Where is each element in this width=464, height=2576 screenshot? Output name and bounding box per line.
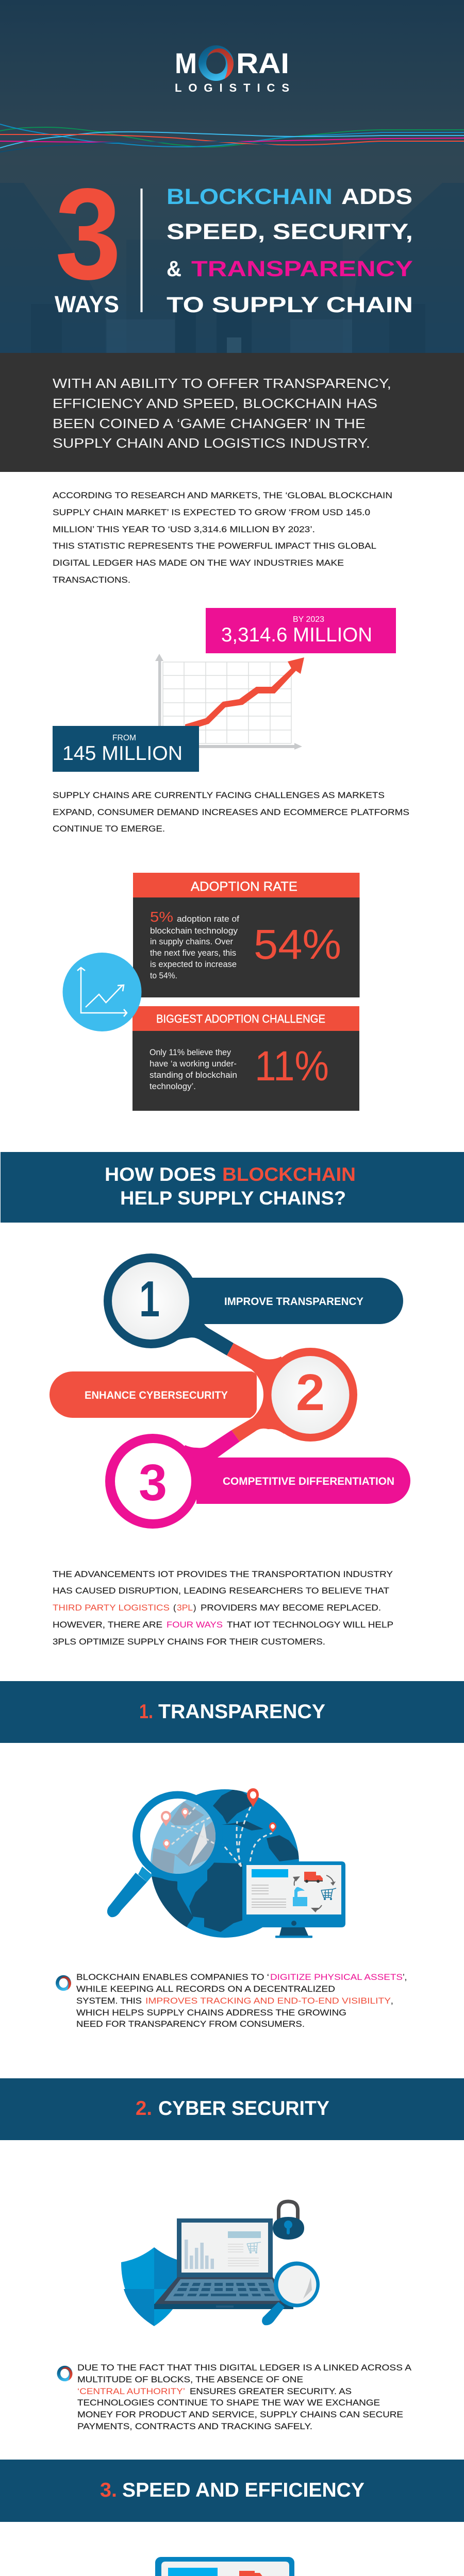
text block: transparency: WHILE KEEPING ALL RECORDS ON A DECENTRALIZED	[76, 1985, 335, 1994]
title	[167, 184, 413, 317]
panel: biggest adoption challenge: standing of blockchain	[150, 1070, 237, 1080]
text block: IoT and 3PL: THIRD PARTY LOGISTICS	[53, 1603, 170, 1613]
step 1: improve transparency: IMPROVE TRANSPARENCY	[224, 1296, 363, 1308]
title: SPEED, SECURITY,	[167, 219, 413, 244]
logo: Morai Logistics: M	[175, 47, 197, 79]
banner heading: 3. speed and efficiency: SPEED AND EFFICIENCY	[122, 2479, 364, 2501]
banner heading: how does blockchain help supply chains: HOW DOES	[105, 1164, 216, 1185]
banner heading: 3. speed and efficiency	[0, 2460, 464, 2522]
monitor with supply chain cycle	[242, 1861, 345, 1938]
text block: IoT and 3PL: 3PLS OPTIMIZE SUPPLY CHAINS FOR THEIR CUSTOMERS.	[53, 1637, 325, 1647]
text block: IoT and 3PL: (	[173, 1603, 176, 1613]
text block: cyber security: PAYMENTS, CONTRACTS AND TRACKING SAFELY.	[77, 2422, 312, 2431]
callout: from 145 million: FROM	[112, 734, 136, 742]
panel: intro statement: WITH AN ABILITY TO OFFER TRANSPARENCY,	[53, 377, 391, 391]
panel: intro statement	[0, 353, 464, 472]
title: TRANSPARENCY	[191, 257, 413, 281]
callout: by 2023	[206, 608, 396, 653]
diagram: three blockchain benefits	[49, 1253, 410, 1529]
text block: cyber security: DUE TO THE FACT THAT THIS DIGITAL LEDGER IS A LINKED ACROSS A	[77, 2363, 411, 2372]
panel: adoption rate: 5%	[150, 909, 173, 925]
panel: biggest adoption challenge	[132, 1006, 359, 1111]
text block: supply chain challenges: SUPPLY CHAINS ARE CURRENTLY FACING CHALLENGES AS MARKETS	[53, 791, 385, 800]
text block: market research paragraph: DIGITAL LEDGER HAS MADE ON THE WAY INDUSTRIES MAKE	[53, 558, 344, 568]
bullet icon: logo ring	[57, 2366, 72, 2381]
magnifying glass	[107, 1791, 216, 1918]
banner heading: how does blockchain help supply chains: BLOCKCHAIN	[222, 1164, 356, 1185]
text block: cyber security: ‘CENTRAL AUTHORITY’	[77, 2387, 185, 2396]
text block: transparency: ’,	[403, 1973, 407, 1982]
step 1: improve transparency: 1	[139, 1270, 160, 1327]
step 2: enhance cybersecurity	[49, 1343, 357, 1442]
title: ADDS	[341, 184, 412, 209]
text block: supply chain challenges: EXPAND, CONSUMER DEMAND INCREASES AND ECOMMERCE PLATFORMS	[53, 808, 409, 817]
banner heading: 2. cyber security: 2.	[136, 2097, 152, 2120]
banner heading: 1. transparency: 1.	[139, 1701, 153, 1723]
text block: transparency	[76, 1973, 407, 2029]
text block: IoT and 3PL: HOWEVER, THERE ARE	[53, 1620, 162, 1630]
divider	[140, 189, 142, 312]
text block: IoT and 3PL: HAS CAUSED DISRUPTION, LEADING RESEARCHERS TO BELIEVE THAT	[53, 1586, 389, 1596]
panel: biggest adoption challenge: Only 11% believe they	[150, 1047, 231, 1057]
step 1: improve transparency	[104, 1253, 403, 1355]
panel: adoption rate: blockchain technology	[150, 926, 238, 936]
panel: intro statement: BEEN COINED A ‘GAME CHANGER’ IN THE	[53, 417, 366, 431]
text block: cyber security	[77, 2363, 411, 2431]
text block: market research paragraph: SUPPLY CHAIN MARKET’ IS EXPECTED TO GROW ‘FROM USD 145.0	[53, 508, 370, 517]
text block: cyber security: MULTITUDE OF BLOCKS, THE ABSENCE OF ONE	[77, 2375, 303, 2384]
text block: supply chain challenges: CONTINUE TO EMERGE.	[53, 824, 165, 834]
logo: Morai Logistics	[175, 45, 289, 94]
step 3: competitive differentiation	[105, 1430, 410, 1529]
panel: adoption rate: adoption rate of	[177, 914, 239, 924]
text block: cyber security: MONEY FOR PRODUCT AND SERVICE, SUPPLY CHAINS CAN SECURE	[77, 2410, 403, 2419]
text block: market research paragraph: TRANSACTIONS.	[53, 575, 130, 585]
chart: market growth	[53, 608, 396, 772]
text block: transparency: WHICH HELPS SUPPLY CHAINS ADDRESS THE GROWING	[76, 2008, 346, 2018]
banner heading: 1. transparency	[0, 1681, 464, 1743]
icon: growth chart circle	[63, 953, 141, 1031]
text block: transparency: NEED FOR TRANSPARENCY FROM CONSUMERS.	[76, 2020, 305, 2029]
globe	[147, 1788, 304, 1938]
banner heading: how does blockchain help supply chains	[1, 1152, 464, 1223]
growth arrow	[185, 657, 304, 728]
banner heading: 3. speed and efficiency: 3.	[100, 2479, 117, 2501]
text block: transparency: BLOCKCHAIN ENABLES COMPANIES TO ‘	[76, 1973, 269, 1982]
text block: supply chain challenges	[53, 791, 409, 834]
logo: Morai Logistics: RAI	[236, 47, 289, 79]
title: TO SUPPLY CHAIN	[167, 293, 413, 317]
text block: market research paragraph	[53, 491, 392, 585]
laptop	[154, 2218, 293, 2309]
text block: transparency: ,	[391, 1996, 393, 2006]
text block: transparency: DIGITIZE PHYSICAL ASSETS	[270, 1973, 403, 1982]
illustration: speed and efficiency scene	[83, 2557, 373, 2576]
text block: IoT and 3PL: THAT IOT TECHNOLOGY WILL HELP	[227, 1620, 393, 1630]
text block: transparency: SYSTEM. THIS	[76, 1996, 142, 2006]
step 3: competitive differentiation: COMPETITIVE DIFFERENTIATION	[223, 1476, 394, 1487]
text block: cyber security: TECHNOLOGIES CONTINUE TO SHAPE THE WAY WE EXCHANGE	[77, 2398, 380, 2408]
title: &	[167, 257, 181, 281]
banner heading: 2. cyber security: CYBER SECURITY	[158, 2097, 329, 2120]
illustration: laptop security	[121, 2201, 320, 2326]
chart grid	[163, 662, 291, 743]
step 2: enhance cybersecurity: ENHANCE CYBERSECURITY	[85, 1389, 228, 1401]
text block: market research paragraph: ACCORDING TO RESEARCH AND MARKETS, THE ‘GLOBAL BLOCKCHAIN	[53, 491, 392, 500]
panel: biggest adoption challenge: technology’.	[150, 1081, 196, 1091]
text block: IoT and 3PL: )	[193, 1603, 196, 1613]
panel: biggest adoption challenge: BIGGEST ADOPTION CHALLENGE	[156, 1012, 325, 1025]
callout: by 2023: BY 2023	[293, 615, 324, 624]
banner heading: 1. transparency: TRANSPARENCY	[158, 1701, 325, 1723]
text block: cyber security: ENSURES GREATER SECURITY. AS	[190, 2387, 352, 2396]
bullet icon: logo ring	[56, 1975, 71, 1991]
header background	[0, 0, 464, 353]
big number: 3 ways: 3	[55, 162, 121, 307]
map pins	[161, 1788, 276, 1850]
callout: by 2023: 3,314.6 MILLION	[221, 624, 372, 646]
decorative flowing lines: header	[0, 124, 464, 152]
text block: IoT and 3PL	[53, 1570, 393, 1647]
text block: market research paragraph: THIS STATISTIC REPRESENTS THE POWERFUL IMPACT THIS GLOBAL	[53, 541, 376, 551]
title: BLOCKCHAIN	[167, 184, 333, 209]
step 2: enhance cybersecurity: 2	[296, 1364, 325, 1421]
padlock	[273, 2201, 304, 2240]
panel: adoption rate: is expected to increase	[150, 959, 237, 969]
panel: intro statement: SUPPLY CHAIN AND LOGISTICS INDUSTRY.	[53, 436, 370, 451]
callout: from 145 million: 145 MILLION	[62, 742, 183, 765]
magnifying glass	[262, 2262, 320, 2325]
panel: adoption rate: ADOPTION RATE	[191, 879, 297, 894]
panel: adoption rate	[133, 873, 360, 997]
banner heading: how does blockchain help supply chains: HELP SUPPLY CHAINS?	[120, 1188, 346, 1209]
monitor	[155, 2557, 294, 2576]
panel: adoption rate: in supply chains. Over	[150, 937, 233, 946]
shield	[121, 2247, 187, 2326]
panel: intro statement: EFFICIENCY AND SPEED, BLOCKCHAIN HAS	[53, 397, 377, 411]
illustration: globe, magnifier and monitor	[107, 1788, 345, 1938]
banner heading: 2. cyber security	[0, 2078, 464, 2140]
chart axes	[155, 654, 302, 750]
text block: IoT and 3PL: PROVIDERS MAY BECOME REPLACED.	[201, 1603, 381, 1613]
panel: biggest adoption challenge: have ‘a working under-	[150, 1059, 237, 1069]
panel: adoption rate: 54%	[254, 921, 341, 968]
panel: adoption rate: the next five years, this	[150, 948, 236, 958]
panel: adoption rate: to 54%.	[150, 971, 177, 980]
text block: market research paragraph: MILLION’ THIS YEAR TO ‘USD 3,314.6 MILLION BY 2023’.	[53, 525, 315, 534]
text block: transparency: IMPROVES TRACKING AND END-TO-END VISIBILITY	[145, 1996, 391, 2006]
panel: biggest adoption challenge: 11%	[255, 1043, 329, 1090]
callout: from 145 million	[53, 726, 199, 772]
big number: 3 ways: WAYS	[55, 291, 119, 317]
text block: IoT and 3PL: FOUR WAYS	[167, 1620, 223, 1630]
text block: IoT and 3PL: 3PL	[177, 1603, 193, 1613]
text block: IoT and 3PL: THE ADVANCEMENTS IOT PROVIDES THE TRANSPORTATION INDUSTRY	[53, 1570, 393, 1579]
logo: Morai Logistics: LOGISTICS	[175, 81, 289, 94]
step 3: competitive differentiation: 3	[139, 1454, 167, 1512]
